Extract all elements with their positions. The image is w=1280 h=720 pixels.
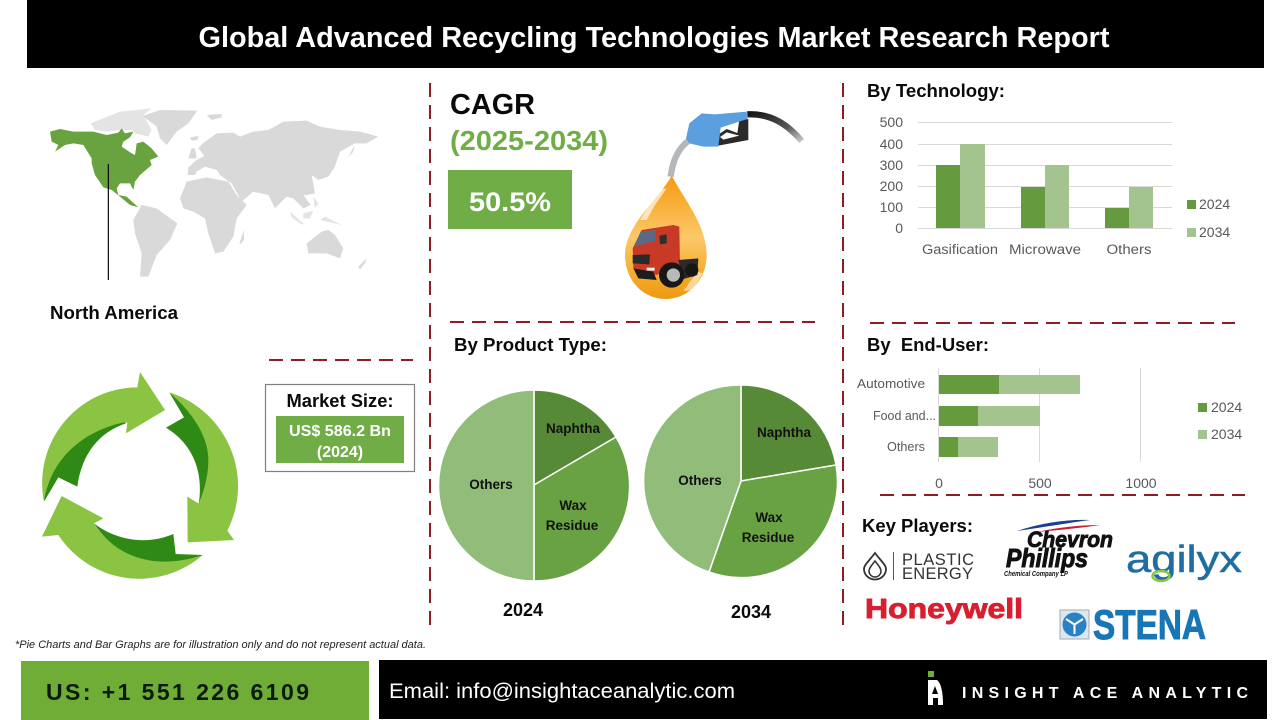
- hose: [747, 114, 802, 141]
- North America highlight: [50, 128, 158, 207]
- CAGR period: (2025-2034): [450, 125, 608, 156]
- pie chart 2024: Residue: [546, 518, 599, 533]
- divider above key players: [880, 494, 1245, 496]
- trigger guard: [717, 119, 748, 146]
- CAGR value: 50.5%: [469, 187, 551, 217]
- bar chart: by technology: 300: [880, 157, 903, 173]
- bar chart: by technology: Microwave: [1009, 242, 1081, 257]
- legend: 2024: [1199, 196, 1230, 212]
- pie year label 2034: 2034: [731, 602, 771, 622]
- heading: by end-user: By End-User:: [867, 335, 989, 355]
- legend: 2034: [1199, 224, 1230, 240]
- disclaimer note: *Pie Charts and Bar Graphs are for illustration only and do not represent actual data.: [15, 639, 426, 651]
- pie chart 2024: Naphtha: [546, 421, 600, 436]
- heading: by technology: By Technology:: [867, 81, 1005, 101]
- icon: recycling arrows: [42, 372, 238, 579]
- logo: Chevron Phillips: Phillips: [1006, 543, 1088, 573]
- map pointer line: [107, 164, 110, 280]
- bar chart: by end-user: 500: [1028, 475, 1052, 491]
- bar chart: by technology: 100: [880, 199, 903, 215]
- logo: Chevron Phillips: Chevron: [1027, 527, 1113, 552]
- bar chart: by technology: Gasification: [922, 242, 998, 257]
- bar chart: by technology: Others: [1106, 242, 1152, 257]
- icon: brand mark: [928, 671, 943, 705]
- email: Email: info@insightaceanalytic.com: [389, 679, 735, 703]
- footer phone panel: [21, 661, 369, 720]
- pie chart 2034: Naphtha: [757, 425, 811, 440]
- title: Global Advanced Recycling Technologies Market Research Report: [198, 22, 1110, 54]
- bar chart: by technology: 400: [880, 136, 903, 152]
- pie chart 2034: [644, 385, 837, 578]
- vertical divider right: [842, 83, 844, 628]
- icon: fuel nozzle and oil drop with truck: [625, 112, 802, 299]
- bar chart: by technology: 0: [895, 220, 903, 236]
- divider under technology chart: [870, 322, 1235, 324]
- CAGR value: [448, 170, 572, 229]
- bar chart: by end-user: Others: [887, 440, 925, 454]
- market size value: (2024): [317, 444, 363, 461]
- logo: Plastic Energy: PLASTIC: [902, 551, 974, 569]
- panel: market size: [266, 384, 414, 472]
- bar chart: by end-user: 1000: [1125, 475, 1157, 491]
- logo: Honeywell: Honeywell: [865, 593, 1023, 624]
- bar chart: by technology: [880, 114, 1230, 257]
- oil drop: [625, 176, 707, 299]
- pie chart 2024: Others: [469, 477, 513, 492]
- region label: North America: [50, 303, 179, 323]
- legend: [1187, 196, 1230, 240]
- legend: 2034: [1211, 426, 1242, 442]
- footer phone panel: US: +1 551 226 6109: [46, 679, 309, 705]
- rest of world land masses: [91, 108, 378, 277]
- bar chart: by end-user: Automotive: [857, 377, 925, 391]
- logo: Chevron Phillips: Chemical Company LP: [1004, 569, 1069, 578]
- pie chart 2024: [438, 390, 630, 581]
- market size value: [276, 416, 404, 463]
- legend: [1198, 399, 1242, 442]
- logo: Stena: [1060, 601, 1206, 648]
- spout: [671, 141, 688, 177]
- legend: 2024: [1211, 399, 1242, 415]
- market size value: US$ 586.2 Bn: [289, 423, 391, 440]
- logo: Chevron Phillips: [1004, 520, 1113, 578]
- market size heading: Market Size:: [286, 391, 394, 411]
- pie chart 2034: Others: [678, 473, 722, 488]
- CAGR heading: CAGR: [450, 89, 535, 121]
- bar chart: by end-user: [857, 368, 1242, 491]
- vertical divider left: [429, 83, 431, 628]
- footer contact panel: [379, 660, 1267, 719]
- bar chart: by technology: 500: [880, 114, 903, 130]
- bar chart: by end-user: 0: [935, 475, 943, 491]
- logo: Plastic Energy: [864, 551, 974, 583]
- divider under CAGR: [450, 321, 815, 323]
- logo: Stena: STENA: [1093, 601, 1206, 648]
- header banner: [27, 0, 1264, 68]
- logo: Plastic Energy: ENERGY: [902, 565, 973, 583]
- bar chart: by technology: 200: [880, 178, 903, 194]
- nozzle: [686, 112, 747, 147]
- truck: [633, 225, 680, 275]
- world map: [50, 108, 378, 280]
- pie chart 2024: Wax: [559, 498, 587, 513]
- bar chart: by end-user: Food and...: [873, 409, 936, 423]
- heading: by product type: By Product Type:: [454, 335, 607, 355]
- pie chart 2034: Wax: [755, 510, 783, 525]
- logo: agilyx: agilyx: [1126, 539, 1242, 581]
- brand name: INSIGHT ACE ANALYTIC: [962, 685, 1248, 702]
- divider above market size: [269, 359, 413, 361]
- pie year label 2024: 2024: [503, 600, 543, 620]
- pie chart 2034: Residue: [742, 530, 795, 545]
- heading: key players: Key Players:: [862, 516, 973, 536]
